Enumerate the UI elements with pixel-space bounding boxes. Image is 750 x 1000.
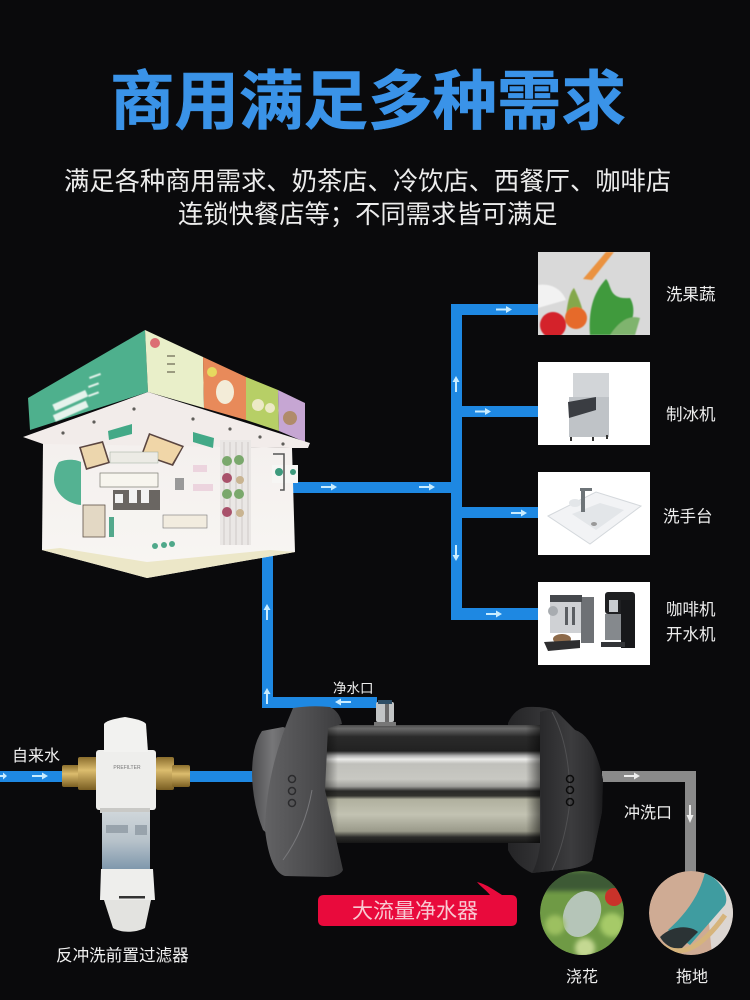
corner logo box xyxy=(272,454,298,490)
label: watering flowers: 浇花 xyxy=(566,968,598,986)
appliance photo: sink xyxy=(538,472,650,555)
sign logo text xyxy=(52,373,101,422)
ceiling lights xyxy=(61,407,285,446)
red product tag: 大流量净水器 xyxy=(352,900,478,923)
right end cap band xyxy=(532,710,603,873)
hanging screens xyxy=(79,433,184,470)
store floor xyxy=(42,548,295,578)
mopping photo xyxy=(649,871,733,955)
pink wall lettering xyxy=(175,465,213,491)
label: tap water: 自来水 xyxy=(12,747,60,765)
brass fittings xyxy=(62,757,190,790)
green sign xyxy=(28,330,148,430)
decorative wall and plant racks xyxy=(220,440,251,545)
appliance labels xyxy=(663,285,716,644)
filter body xyxy=(96,750,156,810)
inlet water pipes xyxy=(0,771,254,782)
left end cap band xyxy=(265,706,343,877)
ceiling xyxy=(23,392,310,448)
top outlet fitting xyxy=(376,702,394,722)
label: mopping: 拖地 xyxy=(676,968,708,986)
flow arrows xyxy=(0,306,694,823)
appliance photo: coffee machine and water dispenser xyxy=(538,582,650,665)
appliance labels: 洗果蔬 xyxy=(666,285,716,304)
service counter and shelves xyxy=(83,452,207,537)
water purifier xyxy=(252,700,603,877)
filter bottom xyxy=(100,869,155,900)
label: clean water outlet: 净水口 xyxy=(333,681,374,696)
blue water pipes to appliances xyxy=(262,304,538,708)
appliance labels: 洗手台 xyxy=(663,507,712,526)
watering flowers photo xyxy=(540,871,624,958)
appliance labels: 开水机 xyxy=(666,625,716,644)
title: 商用满足多种需求 xyxy=(110,66,626,138)
appliance labels: 咖啡机 xyxy=(666,600,716,619)
menu sign panels xyxy=(145,330,305,442)
prefilter brand text: PREFILTER xyxy=(113,765,141,771)
appliance labels: 制冰机 xyxy=(666,405,716,424)
appliance photo: ice machine xyxy=(538,362,650,445)
left end cap outer xyxy=(252,727,320,860)
left round wall graphic xyxy=(54,460,81,505)
label: flush outlet: 冲洗口 xyxy=(624,804,672,822)
subtitle text: 连锁快餐店等；不同需求皆可满足 xyxy=(178,201,557,229)
flush outlet pipe xyxy=(602,771,696,874)
filter bowl xyxy=(102,812,150,870)
red product tag xyxy=(318,882,517,926)
store illustration xyxy=(23,330,310,578)
subtitle text: 满足各种商用需求、奶茶店、冷饮店、西餐厅、咖啡店 xyxy=(64,168,671,196)
subtitle text xyxy=(64,168,671,229)
appliance photo: fruit and vegetables xyxy=(538,252,650,338)
label: prefilter: 反冲洗前置过滤器 xyxy=(56,946,189,965)
prefilter xyxy=(62,717,190,932)
stainless tank xyxy=(322,725,540,843)
store walls xyxy=(42,443,295,578)
right end cap xyxy=(508,707,603,873)
dots on counter xyxy=(152,541,175,549)
green hanging tags xyxy=(108,424,214,448)
